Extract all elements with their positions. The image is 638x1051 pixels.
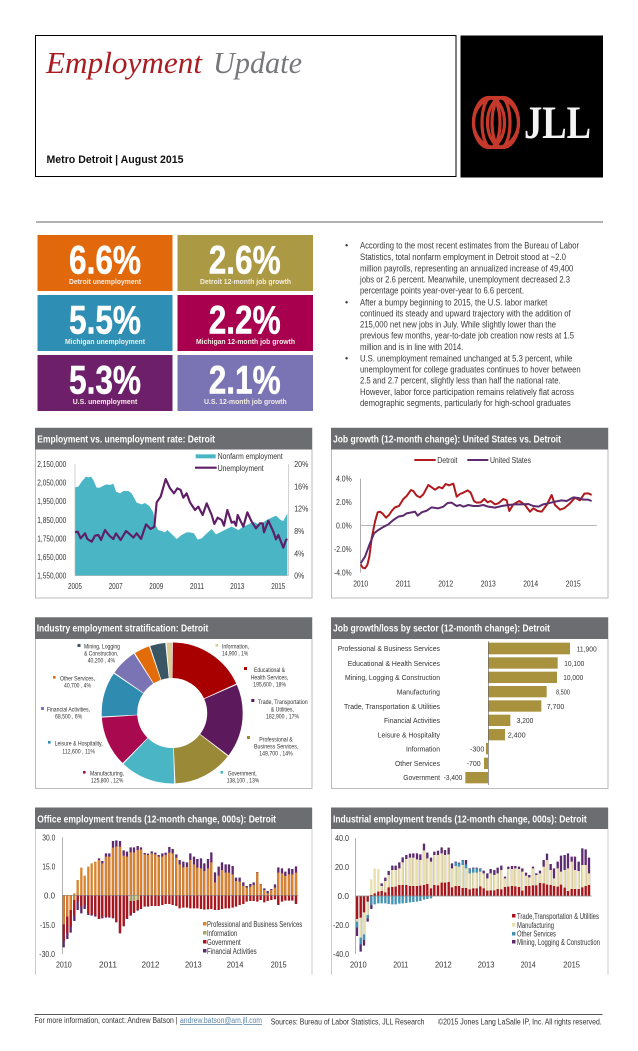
legend: Government — [207, 938, 241, 947]
tile: U.S. unemployment: U.S. unemployment — [73, 397, 138, 406]
right axis labels — [294, 460, 308, 581]
sector labels: Professional & Business Services — [338, 644, 440, 653]
chart: horizontal bars — [465, 641, 570, 785]
chart: two lines — [361, 460, 597, 573]
bullet text block: continued its steady and upward trajectory with the addition of — [360, 309, 571, 319]
left axis labels: 1,650,000 — [37, 553, 67, 562]
sector labels: Information — [406, 744, 440, 753]
donut data labels — [41, 643, 308, 785]
y axis labels: -30.0 — [39, 950, 56, 959]
logo: JLL: JLL — [524, 97, 591, 149]
bullet text block: 2.5 and 2.7 percent, slightly less than half the national rate. — [360, 376, 561, 386]
label: Mining, Logging and Construction: & Construction, — [84, 651, 119, 658]
title: Employment — [45, 45, 203, 80]
label: Other Services: Other Services, — [60, 675, 95, 682]
bullet text block: unemployment for college graduates continues to hover between — [360, 365, 581, 375]
bullet text block: According to the most recent estimates from the Bureau of Labor — [360, 240, 579, 250]
label: Professional and Business: Professional & — [259, 736, 293, 743]
tile: Detroit job growth — [178, 235, 313, 291]
x axis labels: 2013 — [185, 960, 202, 969]
panel: employment vs unemployment — [35, 428, 312, 598]
label: Professional and Business: 149,700 , 14% — [259, 751, 293, 758]
right axis labels: 20% — [294, 460, 308, 469]
y axis labels: -20.0 — [333, 921, 350, 930]
chart: area and line — [75, 454, 288, 576]
label: Educational and Health: Health Services, — [251, 674, 289, 681]
x axis labels: 2014 — [521, 960, 536, 969]
legend labels: Detroit — [437, 456, 458, 465]
x axis labels: 2012 — [142, 960, 159, 969]
label: Leisure and Hospitality: 112,600 , 11% — [62, 749, 95, 756]
y axis labels: -4.0% — [334, 569, 352, 578]
footer: ©2015 Jones Lang LaSalle IP, Inc. All rights reserved. — [438, 1018, 602, 1027]
left axis labels: 1,850,000 — [37, 516, 67, 525]
label: Trade: & Utilities, — [271, 707, 294, 714]
sector labels: Manufacturing — [397, 688, 440, 697]
sector labels: Other Services — [395, 759, 440, 768]
sector values: 10,000 — [563, 673, 583, 682]
bullet text block: U.S. unemployment remained unchanged at 5.3 percent, while — [360, 353, 572, 363]
panel: industry stratification donut — [35, 618, 312, 788]
y axis labels: 4.0% — [336, 475, 352, 484]
label: Manufacturing — [83, 771, 124, 785]
legend labels: Unemployment — [218, 464, 264, 473]
panel: office employment trends — [35, 808, 312, 975]
legend: Financial Activities — [207, 947, 257, 956]
legend: Trade,Transportation & Utilities — [517, 912, 599, 921]
label: Professional and Business — [247, 736, 299, 758]
tile: Detroit job growth: 2.6% — [209, 238, 281, 282]
left axis labels: 2,050,000 — [37, 478, 67, 487]
right axis labels: 0% — [294, 572, 304, 581]
legend — [203, 920, 302, 956]
sector values: 3,200 — [517, 716, 533, 725]
y axis labels: 15.0 — [42, 862, 56, 871]
tile: Detroit job growth: Detroit 12-month job growth — [200, 277, 291, 286]
sector labels — [338, 644, 441, 782]
bullet text block: previous few months, year-to-date job creation now rests at 1.5 — [360, 331, 574, 341]
x axis labels: 2013 — [478, 960, 494, 969]
footer — [34, 1016, 602, 1027]
bullet text block: • — [345, 297, 348, 307]
y axis labels — [39, 833, 56, 959]
sector labels: Financial Activities — [384, 716, 440, 725]
label: Financial Activities — [41, 707, 90, 721]
tile: Michigan unemployment: Michigan unemployment — [65, 337, 145, 346]
label: Mining, Logging and Construction: 40,200 , 4% — [88, 658, 115, 665]
x axis labels: 2005 — [68, 582, 83, 591]
sector values: 8,500 — [556, 688, 570, 697]
sector labels: Mining, Logging & Construction — [345, 673, 440, 682]
right axis labels: 12% — [294, 505, 308, 514]
x axis labels: 2011 — [99, 960, 117, 969]
label: Trade — [251, 699, 308, 721]
x axis labels: 2015 — [563, 960, 581, 969]
x axis labels: 2007 — [109, 582, 123, 591]
tile: U.S. unemployment — [38, 355, 172, 411]
label: Other Services — [53, 675, 95, 690]
label: Information: 14,900 , 1% — [222, 650, 249, 657]
tile: U.S. unemployment: 5.3% — [69, 358, 141, 402]
chart: stacked bars — [356, 838, 592, 954]
bullet text block: percentage points year-over-year to 6.6 percent. — [360, 285, 524, 295]
label: Educational and Health — [244, 667, 289, 689]
label: Educational and Health: Educational & — [254, 667, 286, 674]
x axis labels: 2010 — [350, 960, 367, 969]
chart: donut — [119, 660, 225, 766]
label: Mining, Logging and Construction — [78, 643, 120, 665]
left axis labels — [37, 460, 67, 581]
y axis labels: 0.0 — [338, 892, 350, 901]
label: Manufacturing: Manufacturing, — [90, 771, 124, 778]
sector values: 7,700 — [547, 702, 564, 711]
x axis labels: 2012 — [435, 960, 452, 969]
label: Trade: Trade, Transportation — [258, 699, 308, 706]
legend labels — [218, 452, 283, 473]
x axis labels: 2015 — [271, 582, 286, 591]
tile: U.S. job growth — [178, 355, 313, 411]
left axis labels: 1,750,000 — [37, 534, 67, 543]
sector labels: Leisure & Hospitality — [378, 730, 440, 739]
bullet text block: However, labor force participation remains relatively flat across — [360, 387, 574, 397]
x axis labels: 2014 — [523, 579, 539, 588]
y axis labels: 0.0% — [336, 521, 352, 530]
left axis labels: 2,150,000 — [37, 460, 67, 469]
y axis labels: 30.0 — [42, 833, 56, 842]
y axis labels: 0.0 — [44, 891, 56, 900]
right axis labels: 8% — [294, 527, 304, 536]
x axis labels: 2014 — [227, 960, 244, 969]
bullet text block: • — [345, 240, 348, 250]
label: Leisure and Hospitality — [48, 741, 103, 756]
y axis labels — [334, 475, 352, 578]
left axis labels: 1,950,000 — [37, 497, 67, 506]
x axis labels: 2010 — [353, 579, 369, 588]
legend — [512, 912, 600, 947]
sector values: -700 — [467, 759, 481, 768]
chart: stacked bars — [62, 837, 298, 954]
label: Mining, Logging and Construction: Mining, Logging — [84, 643, 120, 650]
label: Financial Activities: 68,500 , 6% — [55, 714, 83, 721]
x axis labels: 2012 — [438, 579, 453, 588]
sector values: 10,100 — [564, 659, 584, 668]
label: Information — [216, 644, 249, 657]
label: Leisure and Hospitality: Leisure & Hospitality, — [55, 741, 103, 748]
footer: For more information, contact: Andrew Batson | — [34, 1016, 178, 1025]
panel: job growth US vs Detroit — [331, 428, 608, 598]
sector labels: Educational & Health Services — [348, 659, 440, 668]
KPI tiles — [38, 235, 313, 411]
bullet text block: Statistics, total nonfarm employment in Detroit stood at ~2.0 — [360, 252, 566, 262]
label: Trade: 182,900 , 17% — [266, 714, 299, 721]
heading: Office employment trends (12-month change, 000s): Detroit — [37, 813, 276, 825]
bullet text block — [345, 240, 581, 408]
sector values: 11,900 — [577, 645, 597, 654]
sector labels: Trade, Transportation & Utilities — [344, 702, 440, 711]
label: Government: Government, — [228, 771, 257, 778]
x axis labels: 2015 — [566, 579, 581, 588]
y axis labels: -40.0 — [333, 950, 350, 959]
y axis labels: -2.0% — [334, 545, 352, 554]
tile: Detroit unemployment — [38, 235, 172, 291]
legend: Other Services — [517, 930, 556, 938]
tile: Michigan job growth: Michigan 12-month job growth — [196, 337, 295, 346]
x axis labels: 2015 — [271, 960, 287, 969]
right axis labels: 4% — [294, 549, 304, 558]
right axis labels: 16% — [294, 482, 308, 491]
bullet text block: jobs or 2.6 percent. Meanwhile, unemployment decreased 2.3 — [359, 274, 570, 284]
bullet text block: million payrolls, representing an annualized increase of 49,400 — [360, 264, 573, 274]
label: Manufacturing: 125,800 , 12% — [91, 778, 124, 785]
y axis labels: -15.0 — [40, 921, 56, 930]
y axis labels: 20.0 — [335, 863, 350, 872]
panel: job growth by sector — [331, 618, 608, 788]
sector values: -3,400 — [444, 773, 462, 782]
sector values — [444, 645, 597, 782]
x axis labels: 2010 — [56, 960, 72, 969]
x axis labels: 2011 — [190, 582, 204, 591]
heading: Job growth/loss by sector (12-month change): Detroit — [333, 623, 550, 635]
legend: Mining, Logging & Construction — [517, 938, 600, 947]
footer: Sources: Bureau of Labor Statistics, JLL Research — [271, 1018, 424, 1027]
title — [45, 45, 302, 80]
x axis labels: 2011 — [396, 579, 411, 588]
tile: U.S. job growth: 2.1% — [209, 358, 281, 402]
tile: Detroit unemployment: Detroit unemployment — [69, 277, 141, 286]
bullet text block: • — [345, 353, 348, 363]
sector values: 2,400 — [508, 730, 526, 739]
panel: industrial employment trends — [331, 808, 608, 975]
label: Educational and Health: 195,600 , 18% — [253, 682, 286, 689]
heading: Industrial employment trends (12-month change, 000s): Detroit — [333, 813, 587, 825]
x axis labels — [56, 960, 287, 969]
left axis labels: 1,550,000 — [37, 572, 67, 581]
legend labels — [437, 456, 531, 465]
legend: Professional and Business Services — [207, 920, 302, 929]
x axis labels — [353, 579, 581, 588]
legend labels: United States — [490, 456, 531, 465]
sector labels: Government — [403, 773, 441, 782]
x axis labels: 2009 — [149, 582, 163, 591]
x axis labels: 2011 — [393, 960, 408, 969]
label: Professional and Business: Business Services, — [254, 744, 299, 751]
label: Government: 138,100 , 13% — [227, 778, 260, 785]
x axis labels: 2013 — [230, 582, 244, 591]
y axis labels — [333, 834, 350, 959]
label: Information: Information, — [222, 644, 249, 651]
legend: Manufacturing — [517, 921, 554, 930]
heading: Employment vs. unemployment rate: Detroit — [37, 433, 215, 445]
title: Update — [213, 45, 302, 80]
label: Other Services: 40,700 , 4% — [64, 683, 91, 690]
bullet text block: After a bumpy beginning to 2015, the U.S. labor market — [360, 297, 548, 307]
tile: Michigan job growth — [178, 295, 313, 351]
tile: Michigan unemployment: 5.5% — [69, 298, 141, 342]
x axis labels — [68, 582, 286, 591]
subtitle: Metro Detroit | August 2015 — [46, 154, 184, 166]
label: Government — [220, 771, 260, 785]
header box — [36, 36, 456, 176]
y axis labels: 40.0 — [335, 834, 350, 843]
heading: Industry employment stratification: Detroit — [37, 623, 209, 635]
y axis labels: 2.0% — [336, 498, 352, 507]
bullet text block: demographic segments, particularly for high-school graduates — [360, 398, 571, 408]
tile: Michigan job growth: 2.2% — [209, 298, 281, 342]
heading: Job growth (12-month change): United States vs. Detroit — [333, 433, 561, 445]
logo: JLL — [460, 36, 603, 178]
label: Financial Activities: Financial Activities, — [47, 707, 90, 714]
legend: Information — [207, 929, 237, 938]
x axis labels: 2013 — [481, 579, 496, 588]
sector values: -300 — [470, 744, 484, 753]
legend labels: Nonfarm employment — [218, 452, 283, 461]
x axis labels — [350, 960, 581, 969]
tile: U.S. job growth: U.S. 12-month job growth — [204, 397, 287, 406]
footer: andrew.batson@am.jll.com — [180, 1016, 262, 1025]
bullet text block: million and is in line with 2014. — [360, 342, 463, 352]
tile: Michigan unemployment — [38, 295, 172, 351]
tile: Detroit unemployment: 6.6% — [69, 238, 141, 282]
bullet text block: 215,000 net new jobs in July. While slightly lower than the — [360, 320, 556, 330]
